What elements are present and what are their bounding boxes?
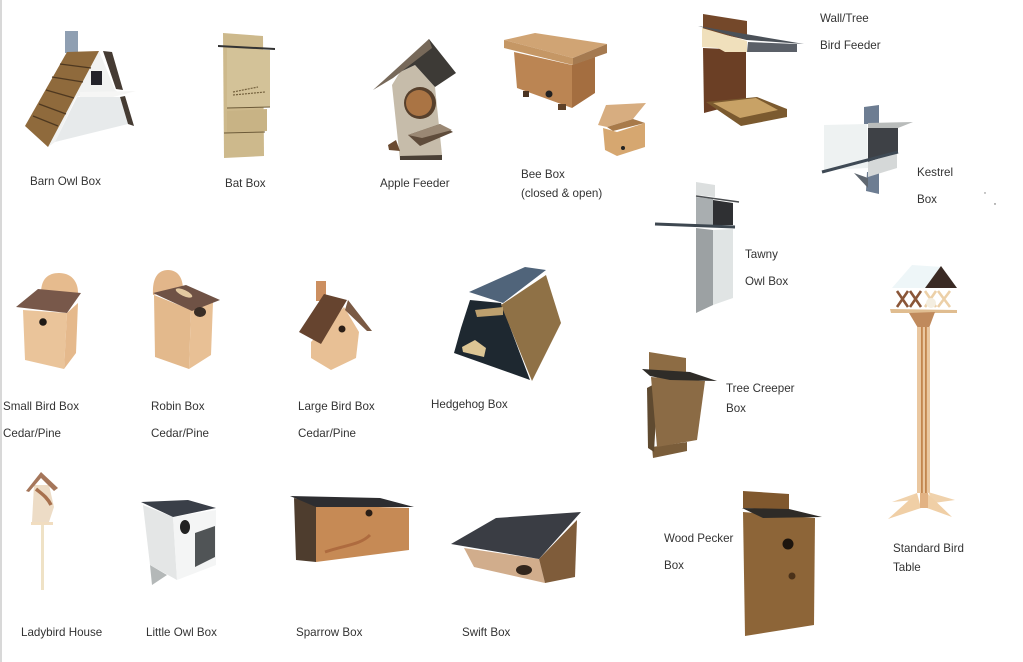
label: kestrel box [917, 166, 953, 206]
label: tawny owl box: Tawny [745, 248, 778, 261]
icon: wood pecker box [742, 491, 822, 636]
label: barn owl box: Barn Owl Box [30, 175, 101, 188]
label: tree creeper box [726, 382, 795, 415]
icon: ladybird house [26, 472, 58, 590]
icon: standard bird table [888, 265, 957, 519]
label: small bird box: Small Bird Box [3, 400, 79, 413]
label: small bird box: Cedar/Pine [3, 427, 61, 440]
icon: kestrel box [822, 105, 913, 194]
label: swift box: Swift Box [462, 626, 511, 639]
label: small bird box [3, 400, 79, 440]
label: little owl box: Little Owl Box [146, 626, 217, 639]
label: hedgehog box: Hedgehog Box [431, 398, 508, 411]
label: bee box [521, 168, 602, 200]
icon: bat box [218, 33, 275, 158]
icon: barn owl box [25, 31, 136, 147]
label: wall/tree bird feeder: Bird Feeder [820, 39, 881, 52]
label: tawny owl box [745, 248, 788, 288]
label: wood pecker box: Box [664, 559, 684, 572]
label: robin box: Cedar/Pine [151, 427, 209, 440]
label: wall/tree bird feeder: Wall/Tree [820, 12, 869, 25]
label: standard bird table: Standard Bird [893, 542, 964, 555]
label: large bird box [298, 400, 375, 440]
icon: swift box [451, 512, 581, 583]
label: standard bird table: Table [893, 561, 921, 574]
icon: wall/tree bird feeder [698, 14, 804, 126]
label: wall/tree bird feeder [820, 12, 881, 52]
label: kestrel box: Kestrel [917, 166, 953, 179]
icon: large bird box [299, 281, 372, 370]
icon: small bird box [16, 273, 81, 369]
label: large bird box: Large Bird Box [298, 400, 375, 413]
icon: little owl box [141, 500, 216, 585]
label: sparrow box: Sparrow Box [296, 626, 363, 639]
icon: tawny owl box [655, 182, 739, 313]
icon: sparrow box [290, 496, 414, 562]
label: ladybird house: Ladybird House [21, 626, 102, 639]
label: large bird box: Cedar/Pine [298, 427, 356, 440]
label: tawny owl box: Owl Box [745, 275, 788, 288]
label: tree creeper box: Box [726, 402, 746, 415]
label: bee box: Bee Box [521, 168, 565, 181]
label: wood pecker box: Wood Pecker [664, 532, 734, 545]
label: wood pecker box [664, 532, 734, 572]
label: tree creeper box: Tree Creeper [726, 382, 795, 395]
label: bee box: (closed & open) [521, 187, 602, 200]
label: standard bird table [893, 542, 964, 574]
icon: hedgehog box [454, 267, 561, 381]
icon: tree creeper box [642, 352, 717, 458]
label: bat box: Bat Box [225, 177, 266, 190]
label: robin box [151, 400, 209, 440]
icon: bee box closed and open [504, 33, 646, 156]
label: kestrel box: Box [917, 193, 937, 206]
icon: robin box [153, 270, 220, 369]
label: robin box: Robin Box [151, 400, 205, 413]
label: apple feeder: Apple Feeder [380, 177, 450, 190]
icon: apple feeder [373, 39, 456, 160]
